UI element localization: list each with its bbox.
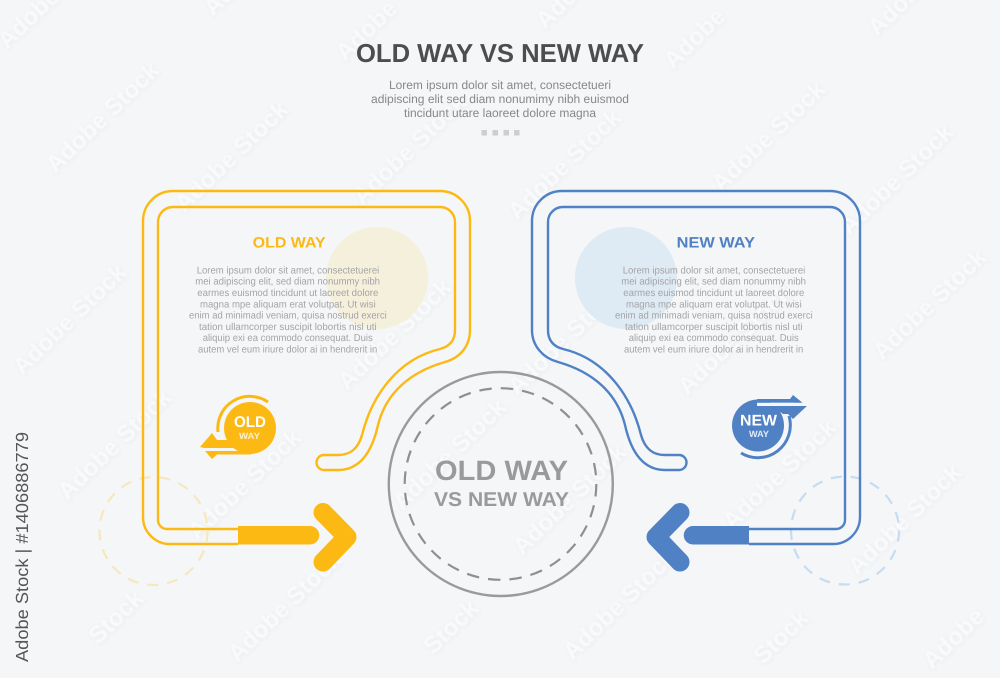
- subtitle text: [371, 78, 629, 120]
- body text: new way: magna mpe aliquam erat volutpat. Ut wisi: [626, 299, 802, 310]
- center label: VS NEW WAY: [434, 489, 570, 511]
- body text: new way: aliquip exi ea commodo consequat. Duis: [629, 333, 799, 344]
- body text: old way: mei adipiscing elit, sed diam nonummy nibh: [195, 277, 380, 288]
- watermark pattern: Adobe Stock: [503, 103, 627, 225]
- icon: new way badge: [732, 395, 807, 458]
- watermark pattern: Stock: [748, 604, 815, 670]
- pale circle: old way: [326, 227, 428, 329]
- body text: new way: autem vel eum iriure dolor ai in hendrerit in: [624, 344, 803, 355]
- body text: old way: tation ullamcorper suscipit lobortis nisl uti: [199, 322, 377, 333]
- subtitle text: adipiscing elit sed diam nonumimy nibh euismod: [371, 92, 629, 106]
- heading: old way: OLD WAY: [253, 234, 326, 252]
- body text: old way: enim ad minimadi veniam, quisa nostrud exerci: [189, 310, 387, 322]
- watermark pattern: Adobe Stock: [53, 383, 177, 505]
- outline path: new way: [532, 191, 860, 544]
- watermark pattern: Adobe Stock: [558, 543, 682, 665]
- body text: new way: earmes euismod tincidunt ut laoreet dolore: [623, 288, 805, 299]
- outline path: old way: [143, 191, 470, 544]
- watermark pattern: Adobe Stock: [8, 258, 132, 380]
- arrow: new way: [656, 512, 749, 562]
- watermark pattern: Adobe Stock: [843, 458, 967, 580]
- watermark pattern: Adobe Stock: [348, 88, 472, 210]
- icon: new way badge: WAY: [749, 429, 769, 439]
- body text: new way: tation ullamcorper suscipit lobortis nisl uti: [625, 322, 803, 333]
- panel: old way: [100, 191, 470, 585]
- watermark pattern: Adobe: [917, 603, 990, 674]
- icon: old way badge: [200, 396, 276, 459]
- center label: [434, 455, 570, 511]
- watermark pattern: Adobe Stock: [170, 95, 294, 217]
- pale circle: new way: [575, 227, 677, 329]
- body text: new way: Lorem ipsum dolor sit amet, consectetuerei: [623, 266, 805, 276]
- stock id caption: Adobe Stock | #1406886779: [12, 432, 32, 662]
- watermark pattern: Adobe Stock: [673, 278, 797, 400]
- watermark pattern: Adobe Stock: [223, 545, 347, 667]
- watermark pattern: Adobe Stock: [388, 393, 512, 515]
- watermark pattern: Stock: [83, 584, 150, 650]
- heading: new way: NEW WAY: [677, 234, 755, 252]
- watermark pattern: Adobe Stock: [707, 75, 831, 197]
- dashed circle: old way: [100, 477, 208, 585]
- watermark pattern: Adobe Stock: [868, 243, 992, 365]
- watermark pattern: Adobe: [658, 3, 731, 74]
- icon: old way badge: OLD: [234, 414, 266, 431]
- center circle: [389, 372, 613, 596]
- title dots: [482, 130, 520, 136]
- icon: old way badge: WAY: [239, 431, 260, 441]
- body text: new way: [615, 266, 813, 355]
- body text: old way: aliquip exi ea commodo consequat. Duis: [203, 333, 373, 344]
- subtitle text: Lorem ipsum dolor sit amet, consectetueri: [389, 78, 611, 92]
- dashed circle: new way: [791, 476, 899, 584]
- watermark pattern: Adobe Stock: [41, 56, 165, 178]
- body text: old way: Lorem ipsum dolor sit amet, consectetuerei: [197, 266, 379, 276]
- panel: new way: [532, 191, 899, 584]
- watermark pattern: Adobe Stock: [718, 413, 842, 535]
- title: OLD WAY VS NEW WAY: [356, 38, 644, 68]
- watermark pattern: Adobe Stock: [508, 438, 632, 560]
- subtitle text: tincidunt utare laoreet dolore magna: [404, 106, 596, 120]
- watermark pattern: Adobe Stock: [835, 118, 959, 240]
- watermark pattern: Adobe Stock: [183, 423, 307, 545]
- center label: OLD WAY: [435, 455, 568, 486]
- body text: new way: mei adipiscing elit, sed diam nonummy nibh: [621, 277, 806, 288]
- body text: new way: enim ad minimadi veniam, quisa nostrud exerci: [615, 310, 813, 322]
- body text: old way: earmes euismod tincidunt ut laoreet dolore: [197, 288, 379, 299]
- icon: new way badge: NEW: [740, 412, 777, 430]
- watermark pattern: Adobe Stock: [333, 273, 457, 395]
- watermark pattern: Stock: [418, 594, 485, 660]
- body text: old way: autem vel eum iriure dolor ai in hendrerit in: [198, 344, 377, 355]
- body text: old way: [189, 266, 387, 355]
- arrow: old way: [238, 512, 347, 562]
- body text: old way: magna mpe aliquam erat volutpat. Ut wisi: [200, 299, 376, 310]
- watermark pattern: Adobe Stock: [503, 278, 627, 400]
